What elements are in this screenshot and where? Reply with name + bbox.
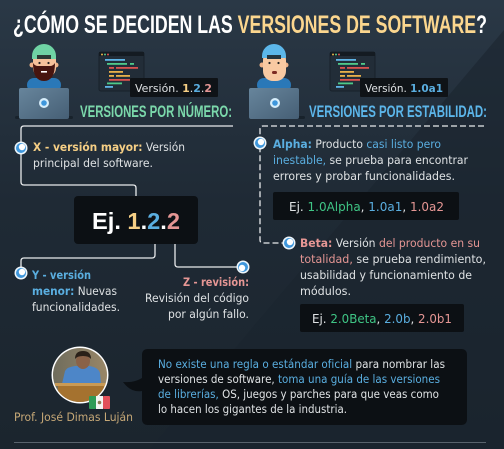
illustration: developer with blue cap and laptop	[249, 44, 305, 119]
node: Y	[14, 266, 28, 280]
text: Y version menor: funcionalidades.	[32, 300, 120, 314]
text: Z revision: Z - revisión:	[183, 275, 249, 289]
connector: stability dashed line	[260, 126, 484, 243]
text: X version mayor: X - versión mayor: Versión	[33, 140, 185, 154]
illustration: code window left	[99, 52, 144, 91]
text: Z revision: Revisión del código	[145, 291, 249, 305]
text: Beta: totalidad, se prueba rendimiento,	[300, 252, 486, 266]
example box: Ej. 1.2.2: Ej. 1.2.2	[92, 208, 180, 234]
text: Beta: módulos.	[300, 284, 351, 298]
example box: Alpha: Ej. 1.0Alpha, 1.0a1, 1.0a2	[289, 199, 444, 214]
text: X version mayor: principal del software.	[33, 156, 153, 170]
example box: Alpha	[273, 192, 459, 220]
example box: Ej. 1.2.2	[74, 196, 198, 244]
heading: versiones por número: VERSIONES POR NÚMERO:	[80, 102, 232, 121]
speech bubble: No existe una regla o estándar oficial para nombrar las	[158, 358, 445, 371]
text: X version mayor	[33, 140, 185, 170]
speech bubble	[123, 349, 467, 425]
version label right	[360, 78, 448, 97]
text: Beta: Beta: Versión del producto en su	[300, 236, 480, 250]
text: Z revision: por algún fallo.	[168, 307, 249, 321]
text: Y version menor: Y - versión	[31, 268, 91, 282]
illustration: code window right	[330, 52, 375, 91]
text: Alpha: Alpha: Producto casi listo pero	[273, 137, 441, 151]
connector: Z to example	[170, 237, 243, 267]
author name: Prof. José Dimas Luján	[14, 410, 133, 424]
version label left	[130, 78, 218, 97]
text: Beta: usabilidad y funcionamiento de	[300, 268, 472, 282]
text: Alpha	[273, 137, 468, 183]
illustration: bearded developer with laptop	[15, 44, 73, 119]
speech bubble: lo hacen los gigantes de la industria.	[158, 403, 347, 416]
text: Y version menor: menor: Nuevas	[32, 284, 117, 298]
example box: Beta	[300, 304, 464, 332]
connector: X to example	[21, 126, 233, 205]
node: X	[14, 142, 28, 154]
version label right: Versión. 1.0a1	[365, 83, 443, 95]
author photo	[50, 345, 110, 405]
speech bubble: versiones de software, toma una guía de las versiones	[158, 373, 440, 386]
example box: Beta: Ej. 2.0Beta, 2.0b, 2.0b1	[312, 311, 452, 326]
connector: Y to example	[21, 237, 160, 272]
node: Alpha	[254, 136, 266, 150]
node: Z	[236, 260, 250, 274]
speech bubble: de librerías, OS, juegos y parches para que veas como	[158, 388, 439, 401]
text: Z revision	[145, 275, 249, 321]
version label left: Versión. 1.2.2	[135, 83, 212, 95]
text: Alpha: errores y probar funcionalidades.	[273, 169, 455, 183]
text: Alpha: inestable, se prueba para encontrar	[273, 153, 468, 167]
node: Beta	[282, 236, 296, 250]
text: Y version menor	[31, 268, 120, 314]
text: Beta	[300, 236, 486, 298]
icon: Mexican flag	[89, 396, 110, 409]
